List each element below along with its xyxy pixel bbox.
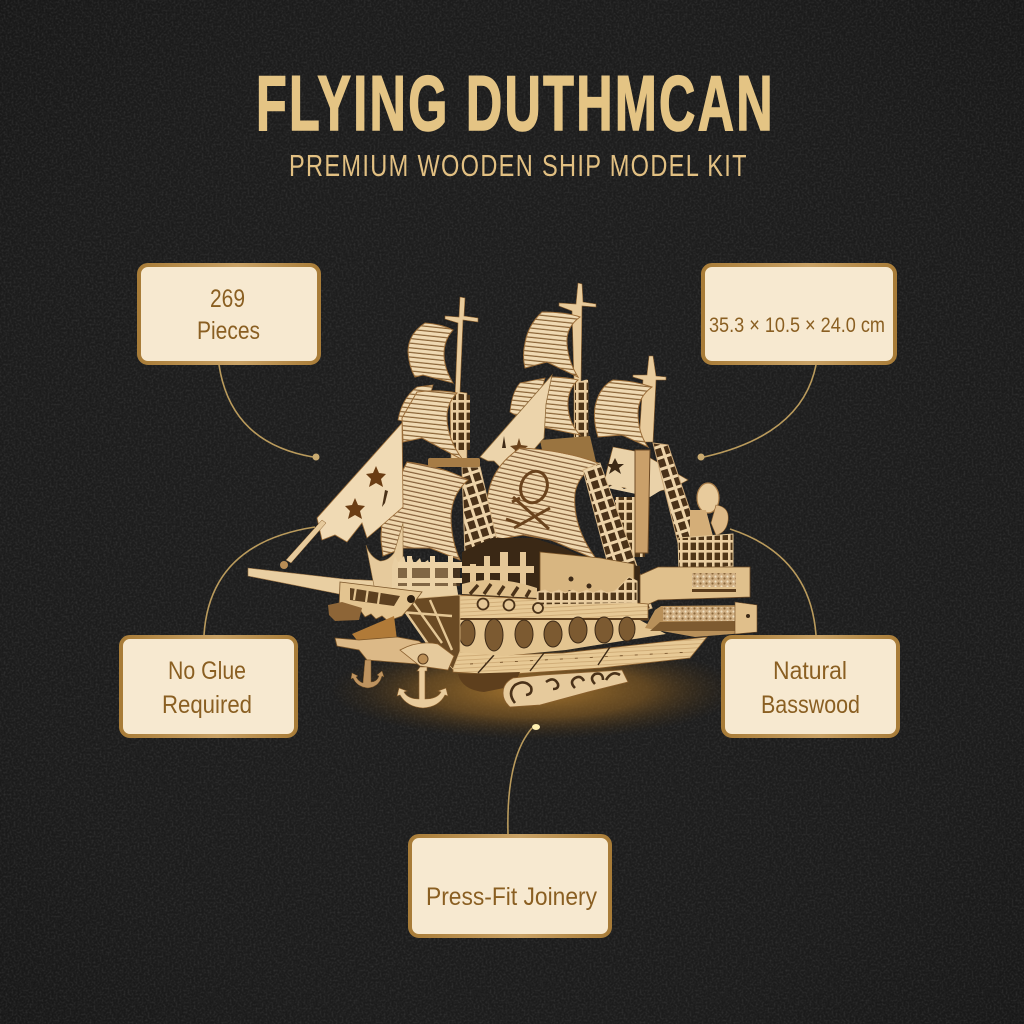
lower hull <box>453 637 707 675</box>
connector: basswood <box>730 529 816 635</box>
aft stern house <box>640 567 750 608</box>
dragon face truss <box>396 595 460 669</box>
mouth interior <box>352 616 397 648</box>
icon: stern disc <box>697 483 719 513</box>
callout: dimensions <box>703 265 895 363</box>
hull <box>328 538 757 675</box>
callout: no glue required: Required <box>162 691 252 719</box>
wave stand <box>458 670 628 707</box>
portholes <box>478 598 543 613</box>
callout: no glue required <box>121 637 296 736</box>
connector: joinery <box>508 724 540 834</box>
connector: dimensions <box>698 365 816 460</box>
callout: natural basswood: Natural <box>773 657 847 685</box>
callout: 269 Pieces <box>139 265 319 363</box>
midship backdrop <box>462 538 640 616</box>
main sail with skull <box>486 448 598 560</box>
dragon upper jaw <box>339 582 422 621</box>
icon: rear anchor <box>351 660 384 688</box>
icon: skull and crossbones <box>506 468 552 529</box>
fore mast group <box>248 297 502 606</box>
connector: no glue <box>204 527 315 635</box>
callout: natural basswood <box>723 637 898 736</box>
carved face band <box>458 618 666 656</box>
middle triangular flag <box>480 375 552 469</box>
gallery arcs <box>462 580 537 598</box>
deck railing <box>537 577 637 605</box>
ship model <box>248 283 757 708</box>
main ladder <box>583 463 652 617</box>
jib sail with stars <box>317 423 403 542</box>
middle mast group <box>480 283 652 617</box>
deck cabin behind main sail <box>540 436 596 462</box>
fore deck railing <box>392 556 460 606</box>
icon: front anchor <box>397 667 448 708</box>
bowsprit <box>248 568 396 595</box>
lower jaw <box>335 637 427 664</box>
aft mast group <box>594 356 733 572</box>
lower stern block <box>645 605 757 637</box>
title: FLYING DUTHMCAN <box>256 60 773 147</box>
callout: dimensions: 35.3 × 10.5 × 24.0 cm <box>709 314 885 337</box>
callout: 269 Pieces: 269 <box>210 285 245 313</box>
callout: natural basswood: Basswood <box>761 691 860 719</box>
connector: pieces <box>219 365 320 460</box>
callout: no glue required: No Glue <box>168 657 246 685</box>
callout: press-fit joinery: Press-Fit Joinery <box>426 883 597 911</box>
glow beneath ship <box>330 640 740 740</box>
callout: 269 Pieces: Pieces <box>197 317 260 345</box>
callout: press-fit joinery <box>410 836 610 936</box>
upper hull band <box>458 595 648 620</box>
subtitle: PREMIUM WOODEN SHIP MODEL KIT <box>289 148 747 183</box>
